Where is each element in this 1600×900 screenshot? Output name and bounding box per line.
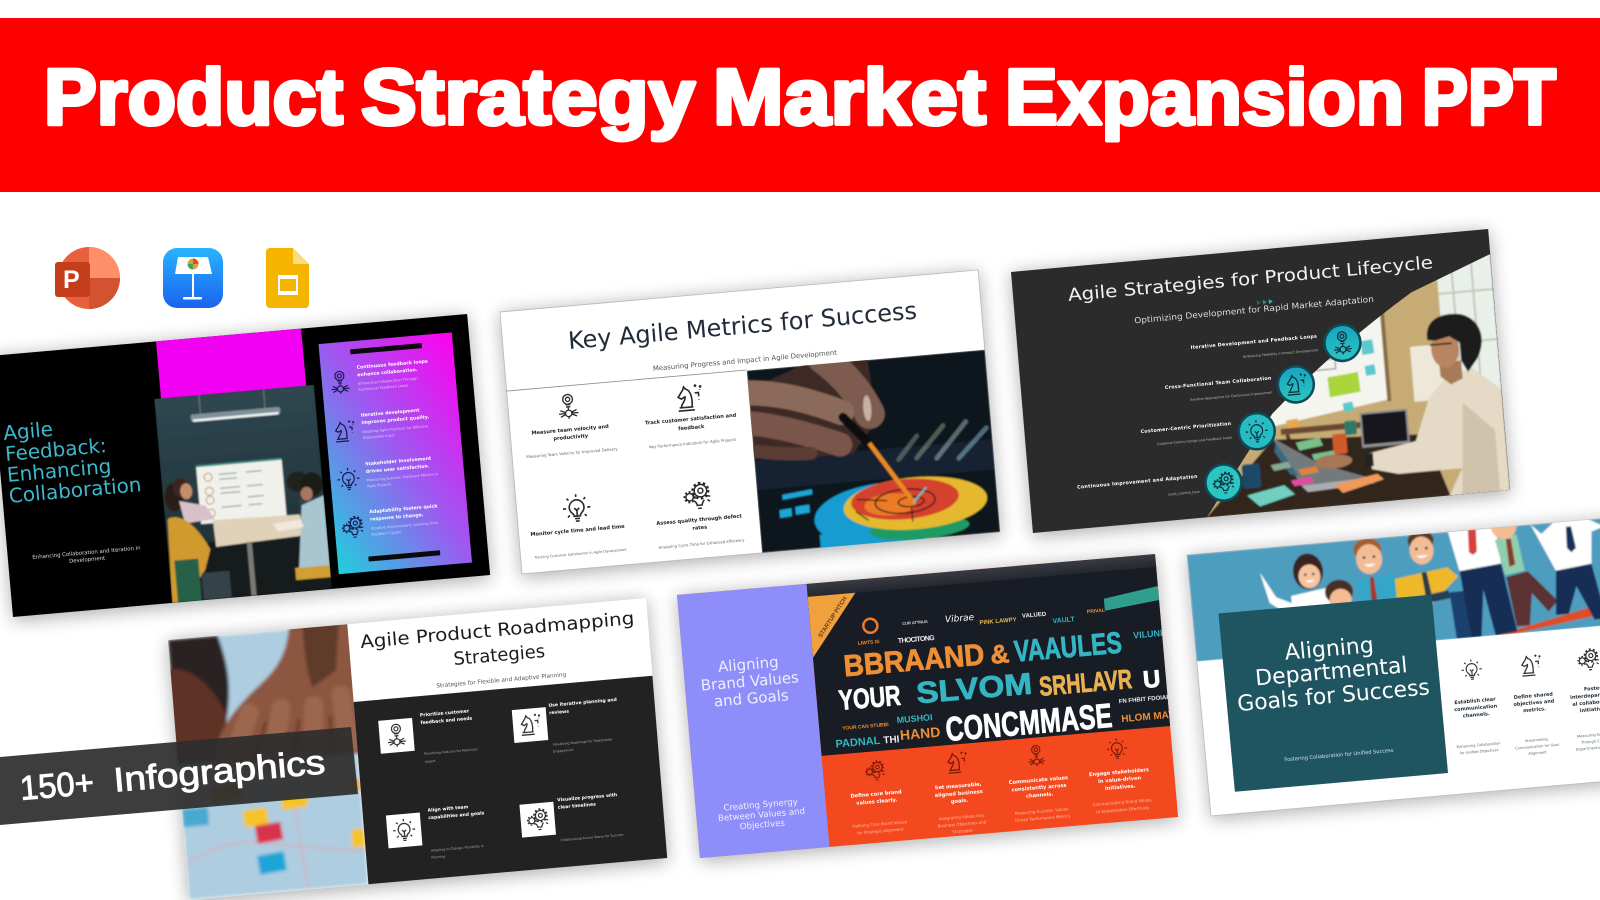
- slide 6 subtitle: Fostering Collaboration for Unified Success: [1284, 748, 1394, 763]
- brand values typography board: PADNAL: [835, 735, 881, 751]
- brand values typography board: STARTUP PITCH: [818, 596, 849, 639]
- brand values typography board: FN FHBIT FDOIAL: [1119, 695, 1171, 705]
- brand values typography board: CUR ATTRUS: [902, 619, 928, 626]
- value 1: Define core brand: [850, 789, 902, 800]
- strategy 3: Adapting to Change: Flexibility in: [431, 844, 484, 853]
- sidebar title: Brand Values: [700, 668, 800, 695]
- value 2: Set measurable,: [935, 781, 982, 791]
- metric 2: [642, 381, 739, 450]
- dark content panel: [354, 676, 667, 884]
- item 4: Feedback Cycles: [371, 530, 401, 537]
- step 4: icon4_subtitle_here: [1168, 490, 1200, 497]
- slide 2 subtitle: Measuring Progress and Impact in Agile Development: [653, 349, 837, 373]
- slide 1: Agile Feedback: [0, 314, 490, 621]
- main title: Expansion: [1005, 52, 1404, 141]
- value 4: in value-driven: [1098, 775, 1142, 785]
- slide 1 title: Agile: [2, 417, 54, 445]
- goal 2: Communication for Goal: [1515, 743, 1559, 751]
- goal 2: Define shared: [1513, 692, 1554, 701]
- value 2: Business Objectives and: [937, 819, 987, 829]
- value 2: aligned business: [935, 789, 983, 799]
- icon: Google Slides: [266, 248, 309, 308]
- brand values typography board: Vibrae: [945, 613, 975, 625]
- goal 3: [1566, 647, 1600, 752]
- strategy 3: Planning: [431, 854, 445, 860]
- value 2: Integrating Values into: [939, 812, 985, 821]
- strategy 3: [386, 803, 488, 863]
- item 4: response to change.: [370, 512, 424, 523]
- item 1: Continuous feedback loops: [356, 359, 428, 371]
- gradient list panel: [319, 332, 472, 574]
- item 3: [336, 455, 439, 491]
- value 1: for Strategic Alignment: [857, 826, 904, 835]
- metric 2: Track customer satisfaction and: [645, 413, 737, 427]
- strategy 3: Align with team: [427, 804, 469, 814]
- brand values typography board: YOUR: [837, 680, 902, 716]
- strategy 1: Prioritize customer: [420, 708, 470, 719]
- item 2: [334, 407, 431, 442]
- value 4: [1086, 736, 1152, 815]
- icon: Keynote: [163, 248, 223, 308]
- slide 1 title: Enhancing: [6, 454, 112, 487]
- value 2: Strategies: [952, 828, 973, 834]
- metric 1: Measuring Team Velocity for Improved Delivery: [526, 446, 619, 459]
- slide 3: Agile Strategies: [1011, 229, 1510, 537]
- metric 2: Key Performance Indicators for Agile Projects: [649, 437, 736, 449]
- item 3: Agile Projects: [367, 482, 391, 488]
- brand values typography board: U: [1142, 666, 1162, 694]
- slide 4: Roadmapping: [163, 593, 668, 900]
- slide 1 subtitle: Development: [69, 556, 105, 565]
- strategy 2: Engagement: [553, 748, 574, 754]
- arrows decoration: [1257, 299, 1273, 305]
- item 2: Stakeholder Input: [363, 433, 395, 440]
- icon: PowerPoint: P: [63, 266, 80, 294]
- item 4: Adaptability fosters quick: [369, 503, 439, 515]
- metric 4: Assess quality through defect: [656, 513, 743, 527]
- brand values typography board: HAND: [899, 724, 941, 743]
- main title: PPT: [1422, 52, 1556, 141]
- slide 6 title: Aligning: [1284, 633, 1375, 666]
- header banner: [0, 18, 1600, 192]
- value 4: initiatives.: [1105, 783, 1136, 792]
- strategy 2: Visualizing Roadmaps for Stakeholder: [553, 737, 614, 747]
- item 1: enhance collaboration.: [357, 367, 418, 378]
- badge text: 150+: [18, 764, 95, 808]
- metric 2: feedback: [678, 424, 705, 432]
- item 3: Stakeholder involvement: [365, 456, 432, 467]
- strategy 2: reviews: [549, 709, 570, 716]
- strategy 1: Impact: [425, 759, 437, 764]
- metric 3: Tracking Customer Satisfaction in Agile Development: [533, 548, 628, 560]
- meeting room photo: [154, 385, 332, 603]
- sidebar title: and Goals: [713, 686, 790, 711]
- item 1: Continuous Feedback Loops: [358, 383, 409, 392]
- teal title panel: [1218, 595, 1448, 792]
- slide 6 title: Departmental: [1254, 653, 1409, 691]
- value 4: to Stakeholders Effectively: [1096, 805, 1150, 814]
- brand values typography board: MUSHOI: [896, 712, 933, 725]
- item 1: [330, 359, 430, 395]
- strategy 4: Collaborating Across Teams for Success: [560, 833, 624, 842]
- metric 1: Measure team velocity and: [531, 424, 609, 437]
- brand values typography board: CONCMMASE: [944, 697, 1114, 749]
- goal 2: objectives and: [1513, 698, 1555, 708]
- badge: 150+ Infographics: [0, 727, 358, 825]
- goal 2: [1507, 654, 1560, 757]
- goal 1: Establish clear: [1454, 697, 1496, 706]
- brand values typography board: VALUED: [1022, 612, 1047, 620]
- value 2: [931, 750, 987, 836]
- badge text: [18, 743, 327, 808]
- metric 4: [653, 479, 745, 550]
- brand values typography board: HLOM MATHS: [1121, 708, 1189, 725]
- value 2: goals.: [951, 798, 968, 805]
- strategy 2: [511, 697, 621, 757]
- metric 1: [522, 390, 619, 459]
- step 1: Embracing Flexibility in Product Development: [1243, 348, 1319, 359]
- item 2: Adapting Agile Practices for Effective: [362, 424, 429, 434]
- step 2: [1164, 365, 1315, 414]
- brand values typography board: BBRAAND: [842, 638, 986, 683]
- brand values typography board: PRIVAL: [1087, 608, 1105, 615]
- brand values typography board: VAULT: [1052, 616, 1076, 625]
- main title: Strategy: [361, 52, 695, 141]
- brand values typography board: THOCITONG: [898, 635, 936, 645]
- sidebar title: [699, 651, 801, 712]
- magenta block: [156, 329, 306, 399]
- strategy 1: feedback and needs: [420, 716, 473, 726]
- strategy 1: [378, 708, 478, 768]
- sidebar subtitle: Between Values and: [718, 807, 805, 824]
- brand values typography board: SLVOM: [915, 667, 1033, 710]
- value 4: Communicating Brand Values: [1092, 797, 1152, 807]
- value 1: [847, 759, 908, 836]
- strategy 4: Visualize progress with: [557, 792, 617, 803]
- slide 3 subtitle: Optimizing Development for Rapid Market Adaptation: [1134, 294, 1374, 325]
- goal 1: for Unified Objectives: [1460, 748, 1499, 755]
- item 2: improves product quality.: [361, 414, 430, 426]
- goal 2: Alignment: [1528, 750, 1547, 756]
- strategy 3: capabilities and goals: [428, 810, 485, 821]
- brand values typography board: LIWTS IS: [858, 639, 880, 647]
- strategy 4: clear timelines: [558, 802, 596, 811]
- item 4: Iterative Improvement: Learning from: [371, 521, 439, 531]
- metric 3: Monitor cycle time and lead time: [530, 524, 625, 538]
- value 3: Measuring Success: Values-: [1014, 806, 1070, 816]
- item 3: Measuring Success: Feedback Metrics in: [366, 472, 438, 482]
- brand values typography board: VAAULES: [1013, 627, 1123, 669]
- slide 6 title: [1232, 629, 1431, 717]
- badge text: Infographics: [112, 743, 327, 800]
- slide 2 title: Key Agile Metrics for Success: [567, 297, 918, 355]
- step 1: Iterative Development and Feedback Loops: [1190, 334, 1317, 351]
- target photo with hand and pen: [741, 344, 1001, 560]
- value 3: [1006, 743, 1072, 823]
- step 3: [1140, 412, 1276, 460]
- slide 1 title: [2, 409, 142, 508]
- goal 1: [1449, 658, 1502, 756]
- brand values typography board: &: [989, 638, 1010, 670]
- metric 1: productivity: [553, 433, 589, 442]
- brand values typography board: VILUND: [1133, 628, 1167, 640]
- slide 6 title: Goals for Success: [1236, 675, 1431, 717]
- value 3: consistently across: [1011, 783, 1067, 793]
- sidebar title: Aligning: [717, 653, 779, 676]
- slide 4 title: Agile Product Roadmapping: [359, 608, 635, 653]
- step 2: Cross-Functional Team Collaboration: [1165, 375, 1272, 391]
- brand values typography board: THI: [883, 734, 900, 747]
- sidebar subtitle: Objectives: [739, 818, 786, 832]
- slide 1 title: Collaboration: [8, 472, 142, 508]
- brand values typography board: SRHLAVR: [1038, 664, 1133, 702]
- item 3: drives user satisfaction.: [366, 463, 430, 475]
- value 4: Engage stakeholders: [1089, 767, 1149, 778]
- slide 1 subtitle: Enhancing Collaboration and Iteration in: [32, 546, 141, 561]
- step 1: [1190, 323, 1362, 374]
- slide 5: Brand Values: [677, 552, 1198, 862]
- main title: [44, 52, 1556, 141]
- goal 2: metrics.: [1523, 706, 1546, 714]
- goal 1: communication: [1454, 703, 1498, 713]
- step 4: Continuous Improvement and Adaptation: [1077, 474, 1198, 491]
- strategy 2: Use iterative planning and: [548, 697, 617, 709]
- metric 4: Analyzing Cycle Time for Enhanced Efficiency: [658, 537, 745, 550]
- item 2: Iterative development: [361, 407, 421, 419]
- brand values typography board: YOUR CAN STUBBI: [842, 722, 890, 732]
- slide 3 title: Agile Strategies for Product Lifecycle: [1067, 253, 1434, 306]
- strategy 4: [519, 792, 624, 846]
- value 3: Driven Performance Metrics: [1015, 813, 1071, 823]
- item 4: [341, 503, 441, 539]
- slide 1 title: Feedback:: [4, 433, 108, 466]
- purple sidebar: [677, 584, 829, 858]
- slide 4 title: [359, 608, 637, 678]
- value 3: Communicate values: [1009, 775, 1068, 786]
- brand values typography board: PINK LAWPY: [979, 617, 1017, 626]
- sidebar subtitle: Creating Synergy: [723, 797, 798, 814]
- value 3: channels.: [1026, 791, 1054, 800]
- value 1: values clearly.: [856, 797, 897, 807]
- goal 1: channels.: [1463, 711, 1490, 719]
- brand values typography board: [806, 552, 1190, 760]
- slide 4 subtitle: Strategies for Flexible and Adaptive Planning: [436, 672, 567, 690]
- sidebar subtitle: [717, 797, 806, 834]
- strategy 1: Prioritizing Features for Maximum: [424, 747, 478, 756]
- metric 3: [527, 490, 628, 560]
- main title: Market: [713, 52, 986, 141]
- step 2: Iterative Approaches for Continuous Improvement: [1190, 390, 1273, 402]
- step 3: Customer-Centric Prioritization: [1140, 421, 1232, 435]
- metric 4: rates: [692, 525, 707, 532]
- slide 2: Key Agile Metrics: [500, 270, 1001, 581]
- goal 1: Enhancing Collaboration: [1457, 741, 1501, 749]
- goal 2: Streamlining: [1525, 737, 1548, 743]
- cartoon team illustration: [1187, 518, 1600, 662]
- slide 1 subtitle: [32, 546, 141, 568]
- hands over map photo: [163, 619, 373, 900]
- value 1: Defining Core Brand Values: [852, 819, 907, 829]
- icon: PowerPoint: [55, 247, 120, 309]
- main title: Product: [44, 52, 343, 141]
- step 4: [1076, 463, 1243, 514]
- step 3: Customer-Centric Design and Feedback Loops: [1157, 435, 1233, 446]
- slide 6: Departmental Goals: [1186, 497, 1600, 820]
- slide 4 title: Strategies: [453, 641, 546, 670]
- item 1: Enhancing Collaboration Through: [358, 377, 418, 386]
- office photo with man: [1187, 249, 1510, 518]
